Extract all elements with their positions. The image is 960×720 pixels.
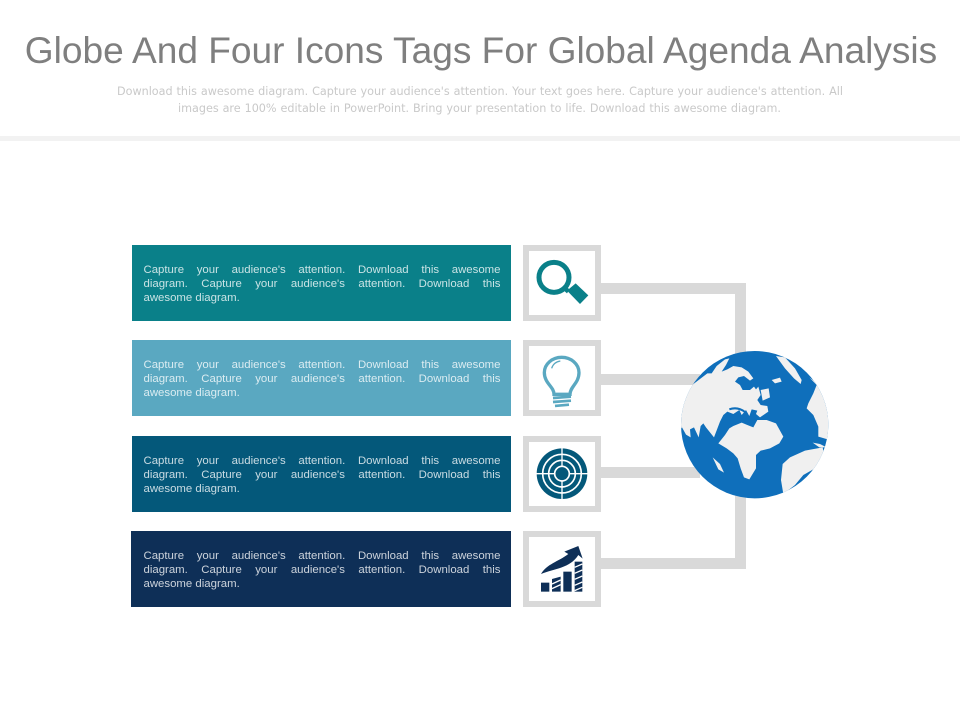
diagram graphics [523, 245, 828, 607]
Iceland land [772, 378, 782, 383]
panel: text bar 1: awesome diagram. [144, 292, 240, 304]
South America land [781, 447, 824, 494]
globe [678, 351, 830, 498]
subtitle text: images are 100% editable in PowerPoint. Bring your presentation to life. Download this awesome diagram. [178, 102, 781, 115]
panel: text bar 4: awesome diagram. [144, 578, 240, 590]
icon box 4 [526, 534, 598, 604]
panel: text bar 3: awesome diagram. [144, 482, 240, 494]
icon box 2 [526, 343, 598, 413]
subtitle text [117, 85, 843, 115]
Eurasia land [678, 358, 768, 437]
panel: text bar 2: diagram. Capture your audience's attention. Download this [144, 372, 500, 384]
panel: text bar 3: Capture your audience's attention. Download this awesome [144, 454, 500, 466]
panel: text bar 2: awesome diagram. [144, 386, 240, 398]
British Isles land [761, 388, 770, 401]
panel: text bar 4: Capture your audience's attention. Download this awesome [144, 550, 500, 562]
North America land [807, 377, 830, 440]
Black Sea [729, 408, 745, 412]
icon: target [536, 447, 588, 500]
title: Globe And Four Icons Tags For Global Agenda Analysis [25, 29, 937, 71]
panel: text bar 1: Capture your audience's attention. Download this awesome [144, 264, 500, 276]
panel: text bar 3: diagram. Capture your audience's attention. Download this [144, 468, 500, 480]
connector lines [600, 283, 746, 569]
Caribbean land [813, 443, 827, 447]
panel: text bar 2: Capture your audience's attention. Download this awesome [144, 358, 500, 370]
panel: text bar 4 [131, 531, 511, 607]
Africa land [718, 420, 783, 479]
panel: text bar 2 [132, 340, 511, 416]
Madagascar land [713, 457, 724, 473]
subtitle text: Download this awesome diagram. Capture your audience's attention. Your text goes here. Capture your audience's attention. All [117, 85, 843, 98]
icon box 3 [526, 439, 598, 509]
icon: light bulb [544, 357, 579, 406]
icon box 1 [526, 248, 598, 318]
Greenland land [776, 356, 802, 384]
icon: growth chart [541, 546, 583, 592]
panel: text bar 3 [132, 436, 511, 512]
panel: text bar 4: diagram. Capture your audience's attention. Download this [144, 564, 500, 576]
icon: magnifying glass [539, 262, 588, 304]
panel: text bar 1 [132, 245, 511, 321]
panel: text bar 1: diagram. Capture your audience's attention. Download this [144, 278, 500, 290]
